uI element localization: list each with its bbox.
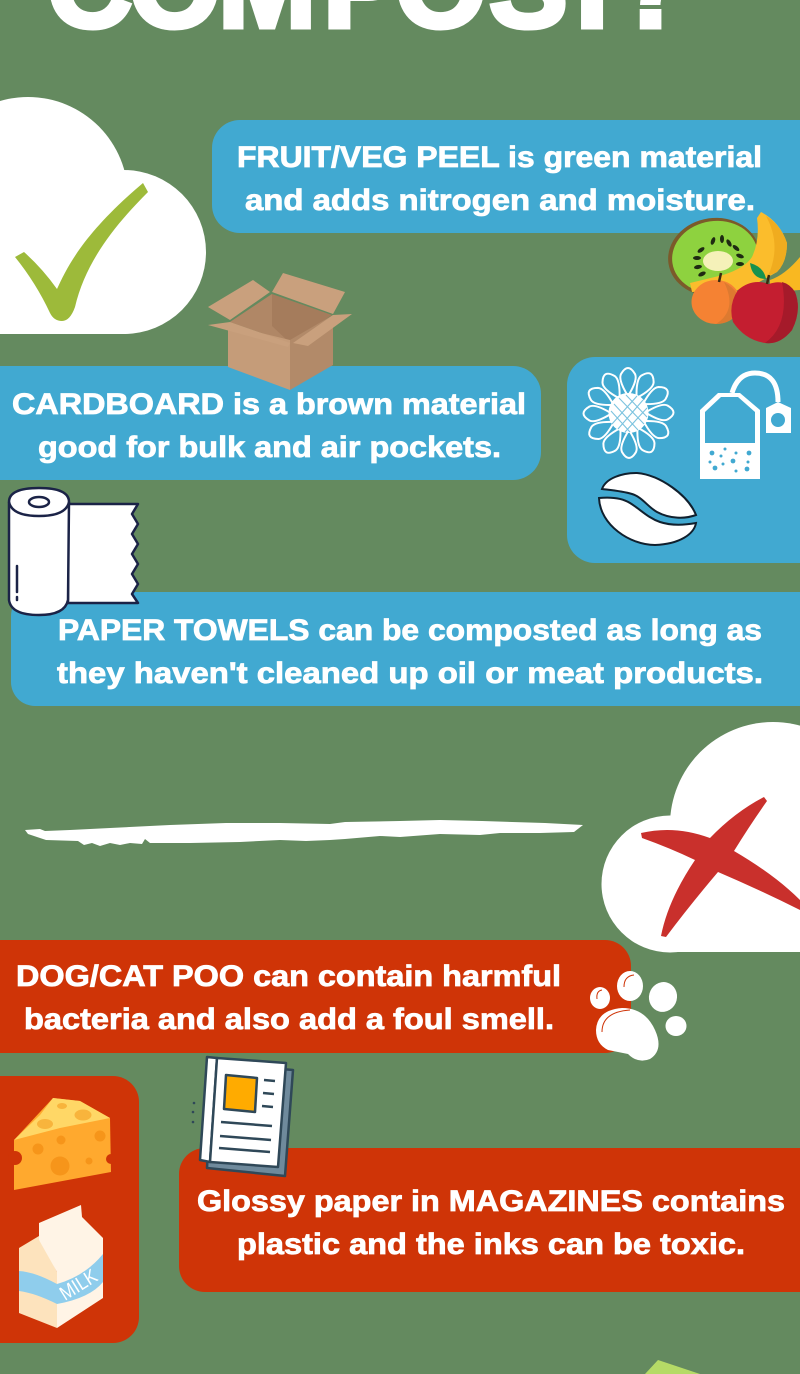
panel: glossy magazines: Glossy paper in MAGAZINES contains xyxy=(197,1185,785,1218)
icon: coffee bean xyxy=(599,473,696,545)
panel: compostable items xyxy=(567,357,800,563)
icon: milk carton: MILK xyxy=(56,1265,102,1305)
icon: white cloud with green check mark xyxy=(0,97,206,334)
icon: green shape at bottom edge xyxy=(645,1360,700,1374)
icon: milk carton xyxy=(19,1205,103,1328)
panel: fruit and veg peel: FRUIT/VEG PEEL is green material xyxy=(237,141,762,174)
icon: cardboard box xyxy=(208,273,352,390)
icon: flower xyxy=(584,368,674,458)
panel: cardboard: CARDBOARD is a brown material xyxy=(12,388,526,421)
panel: cheese and milk xyxy=(0,1076,139,1343)
panel: glossy magazines: plastic and the inks can be toxic. xyxy=(237,1228,745,1261)
icon: paper towel roll xyxy=(9,488,138,615)
icon: fruit pile xyxy=(663,212,800,343)
panel: glossy magazines xyxy=(179,1148,800,1292)
panel: paper towels xyxy=(11,592,800,706)
panel: paper towels: they haven't cleaned up oil or meat products. xyxy=(57,657,763,690)
panel: dog and cat poo: DOG/CAT POO can contain harmful xyxy=(16,960,561,993)
icon: tea bag xyxy=(700,373,791,479)
panel: fruit and veg peel xyxy=(212,120,800,233)
panel: cardboard: good for bulk and air pockets. xyxy=(38,431,501,464)
icon: paw print xyxy=(590,971,686,1061)
panel: dog and cat poo: bacteria and also add a foul smell. xyxy=(24,1003,554,1036)
icon: magazine xyxy=(192,1057,293,1176)
icon: white cloud with red cross xyxy=(602,722,800,952)
panel: dog and cat poo xyxy=(0,940,631,1053)
divider: white brush stroke xyxy=(25,820,583,846)
icon: cheese xyxy=(8,1098,116,1190)
panel: paper towels: PAPER TOWELS can be composted as long as xyxy=(58,614,762,647)
panel: fruit and veg peel: and adds nitrogen and moisture. xyxy=(245,184,755,217)
panel: cardboard xyxy=(0,366,541,480)
